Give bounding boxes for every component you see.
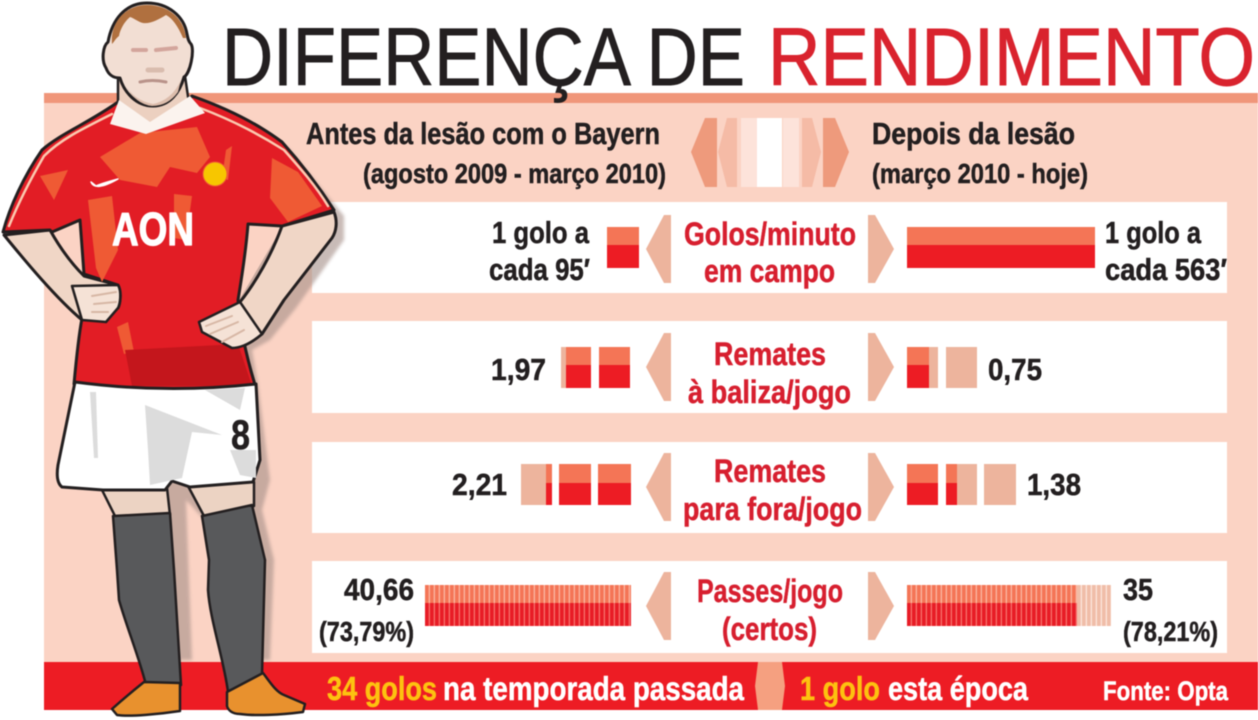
right value	[1123, 572, 1218, 647]
thighs	[101, 482, 254, 518]
this season goals	[800, 670, 1029, 707]
right bars	[907, 347, 977, 388]
left value: 1,97	[491, 352, 546, 387]
column heading: after injury	[872, 116, 1088, 189]
neck and head	[103, 3, 192, 135]
right hand	[199, 302, 262, 348]
metric label: em campo	[704, 253, 835, 289]
column heading: after injury: (março 2010 - hoje)	[872, 158, 1088, 189]
metric label: Remates	[714, 453, 826, 489]
metric label	[684, 216, 856, 289]
face shading	[133, 48, 176, 50]
left value	[489, 215, 590, 287]
left bar	[607, 227, 639, 268]
left value: 2,21	[452, 467, 507, 502]
row: passes	[312, 561, 1227, 653]
sponsor: AON	[112, 203, 194, 255]
this season goals: 1 golo	[800, 670, 880, 707]
metric label: para fora/jogo	[683, 491, 862, 527]
left hand	[72, 285, 120, 322]
arm: left	[4, 230, 120, 322]
header arrows	[691, 118, 849, 187]
right bar	[907, 227, 1095, 268]
right value	[1105, 215, 1227, 287]
right value: 1 golo a	[1105, 215, 1202, 250]
metric label	[688, 336, 851, 410]
metric label: Golos/minuto	[684, 216, 856, 252]
right arrow	[868, 572, 894, 640]
shirt highlights	[40, 127, 322, 354]
left bars	[561, 347, 630, 388]
left value	[319, 572, 414, 647]
panel: background	[44, 93, 1258, 663]
source: Fonte: Opta	[1103, 676, 1229, 706]
boots	[112, 673, 305, 716]
player illustration	[3, 3, 344, 716]
right arrow	[868, 333, 894, 401]
left arrow	[646, 453, 671, 521]
metric label: (certos)	[722, 611, 817, 647]
crest	[203, 162, 227, 186]
left value: 1 golo a	[492, 215, 590, 250]
column heading: before injury: (agosto 2009 - março 2010)	[363, 158, 666, 189]
right value: (78,21%)	[1123, 616, 1218, 647]
right value: 0,75	[988, 352, 1042, 387]
right value: 1,38	[1027, 467, 1081, 502]
right arrow	[868, 215, 894, 283]
metric label	[683, 453, 862, 527]
metric label: Passes/jogo	[697, 573, 843, 609]
left arrow	[646, 572, 671, 640]
shorts	[57, 382, 260, 490]
last season goals	[327, 670, 745, 707]
collar	[110, 96, 205, 134]
row: shots off target	[312, 442, 1227, 533]
column heading: before injury	[306, 116, 666, 189]
swoosh	[91, 179, 118, 186]
row: goals per minute	[312, 202, 1227, 293]
left value: 40,66	[344, 572, 414, 607]
right striped bar	[907, 585, 1111, 626]
column heading: after injury: Depois da lesão	[872, 116, 1075, 151]
right bars	[907, 464, 1016, 505]
left value: (73,79%)	[319, 616, 414, 647]
shirt number: 8	[231, 411, 250, 458]
right arrow	[868, 453, 894, 521]
hair	[112, 5, 186, 44]
shirt	[3, 96, 334, 391]
title	[222, 12, 1255, 103]
this season goals: esta época	[888, 670, 1029, 707]
shorts shading	[90, 388, 256, 485]
last season goals: na temporada passada	[443, 670, 745, 707]
column heading: before injury: Antes da lesão com o Bayern	[306, 116, 660, 151]
socks	[113, 505, 265, 692]
bottom banner	[44, 662, 1258, 710]
metric label: à baliza/jogo	[688, 374, 851, 410]
shirt piping	[9, 108, 328, 226]
row: shots on target	[312, 321, 1227, 413]
left arrow	[646, 333, 671, 401]
metric label: Remates	[714, 336, 826, 372]
shirt dark folds	[125, 344, 252, 386]
last season goals: 34 golos	[327, 670, 437, 707]
right value: cada 563′	[1105, 252, 1227, 287]
metric label	[697, 573, 843, 647]
left striped bar	[425, 585, 631, 626]
banner divider chevron	[755, 662, 785, 710]
right value: 35	[1123, 572, 1153, 607]
gap between right arm and body	[238, 224, 284, 302]
arm: right	[199, 212, 336, 348]
left arrow	[646, 215, 671, 283]
title: DIFERENÇA DE	[222, 12, 745, 103]
player shadow	[130, 100, 344, 660]
left value: cada 95′	[489, 252, 590, 287]
left bars	[521, 464, 631, 505]
